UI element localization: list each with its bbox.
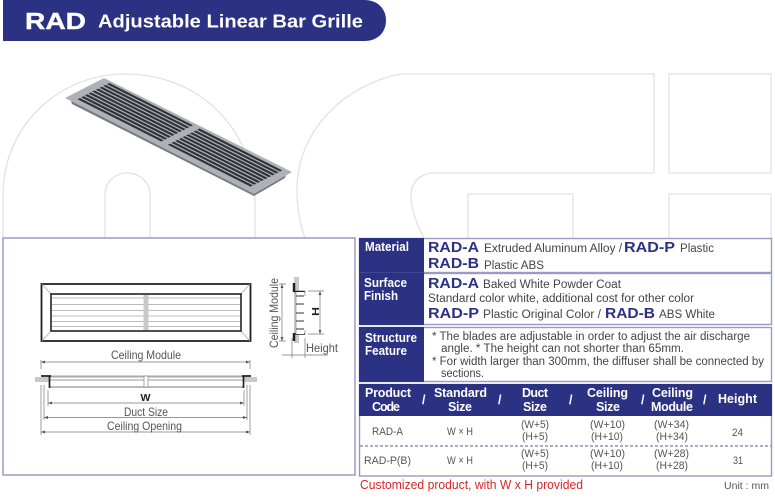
surface finish text: RAD-P	[428, 305, 479, 322]
surface finish text: Standard color white, additional cost for other color	[428, 293, 694, 305]
background watermark logo outlines	[3, 74, 771, 238]
table header: /	[498, 393, 502, 407]
material text: RAD-B	[428, 255, 479, 272]
table header: Product	[365, 386, 412, 400]
table header: Ceiling	[587, 386, 628, 400]
side view drawing	[267, 277, 339, 358]
table header	[365, 386, 758, 414]
material text: RAD-P	[624, 239, 675, 256]
surface finish text: ABS White	[659, 309, 715, 321]
label: ceiling opening: Ceiling Opening	[107, 419, 182, 433]
structure feature text: sections.	[441, 368, 484, 380]
table header: Size	[523, 400, 547, 414]
table header: Size	[596, 400, 620, 414]
heading: material: Material	[365, 240, 409, 254]
structure feature text	[432, 331, 764, 380]
table header: /	[641, 393, 645, 407]
structure feature text: angle. * The height can not shorter than 65mm.	[441, 343, 684, 355]
table row: RAD-A: (H+10)	[591, 431, 623, 443]
table header: Size	[448, 400, 472, 414]
surface finish text: RAD-B	[605, 305, 655, 322]
table row: RAD-P(B): (W+5)	[521, 448, 549, 460]
table row: RAD-P(B)	[364, 448, 743, 472]
specification table	[359, 384, 772, 476]
dimension arrowheads	[41, 284, 322, 434]
table header: /	[569, 393, 573, 407]
table row: RAD-P(B): (H+28)	[656, 460, 688, 472]
section view drawing	[35, 376, 257, 388]
table row: RAD-A: (H+5)	[522, 431, 548, 443]
table row: RAD-P(B): 31	[733, 455, 743, 467]
table row: RAD-A: W × H	[447, 426, 473, 438]
table row: RAD-P(B): RAD-P(B)	[364, 455, 411, 467]
table header: Duct	[522, 386, 549, 400]
label: W: W	[140, 393, 151, 404]
surface finish text	[428, 275, 715, 322]
surface finish text: RAD-A	[428, 275, 479, 292]
surface finish text: Baked White Powder Coat	[483, 279, 622, 291]
label: ceiling module: Ceiling Module	[111, 348, 181, 362]
table header: Standard	[434, 386, 487, 400]
label: duct size: Duct Size	[124, 405, 168, 419]
material text: Plastic ABS	[484, 260, 544, 272]
table row: RAD-A: (H+34)	[656, 431, 688, 443]
table row: RAD-A: (W+34)	[654, 419, 689, 431]
product code: RAD	[25, 8, 86, 34]
table row: RAD-A	[372, 419, 743, 443]
heading: surface finish: Finish	[364, 289, 398, 303]
table row: RAD-P(B): (H+10)	[591, 460, 623, 472]
table header: Height	[718, 392, 758, 406]
table row: RAD-P(B): (W+10)	[590, 448, 625, 460]
panel: dimension drawings	[3, 238, 355, 475]
label: height: Height	[306, 341, 339, 355]
heading: structure feature: Structure	[365, 331, 417, 345]
product illustration: grille	[65, 78, 292, 196]
unit note: Unit : mm	[724, 481, 769, 492]
product name: Adjustable Linear Bar Grille	[98, 12, 363, 32]
table header: /	[422, 393, 426, 407]
material text	[428, 239, 714, 272]
panel: material	[359, 238, 772, 273]
title banner	[3, 0, 386, 41]
surface finish text: Plastic Original Color /	[483, 309, 602, 321]
table row: RAD-A: (W+5)	[521, 419, 549, 431]
table header: Code	[372, 400, 400, 414]
material text: Plastic	[680, 243, 714, 255]
heading: surface finish	[364, 276, 407, 303]
table row: RAD-A: 24	[732, 427, 743, 439]
table header: Ceiling	[652, 386, 693, 400]
structure feature text: * For width larger than 300mm, the diffuser shall be connected by	[432, 356, 764, 368]
table header: Module	[651, 400, 693, 414]
heading: structure feature	[365, 331, 417, 358]
table row: RAD-A: (W+10)	[590, 419, 625, 431]
table header: /	[703, 393, 707, 407]
structure feature text: * The blades are adjustable in order to adjust the air discharge	[432, 331, 750, 343]
panel: structure feature	[359, 327, 772, 382]
table row: RAD-P(B): (W+28)	[654, 448, 689, 460]
table row: RAD-P(B): (H+5)	[522, 460, 548, 472]
table row: RAD-P(B): W × H	[447, 455, 473, 467]
material text: Extruded Aluminum Alloy /	[484, 243, 623, 255]
label: side ceiling module: Ceiling Module	[267, 278, 281, 348]
label: H: H	[311, 307, 322, 316]
customization note: Customized product, with W x H provided	[360, 478, 583, 492]
front view drawing	[42, 284, 250, 341]
panel: surface finish	[359, 273, 772, 325]
material text: RAD-A	[428, 239, 479, 256]
heading: structure feature: Feature	[365, 344, 407, 358]
table row: RAD-A: RAD-A	[372, 426, 404, 438]
dimension lines	[41, 360, 250, 435]
heading: surface finish: Surface	[364, 276, 407, 290]
